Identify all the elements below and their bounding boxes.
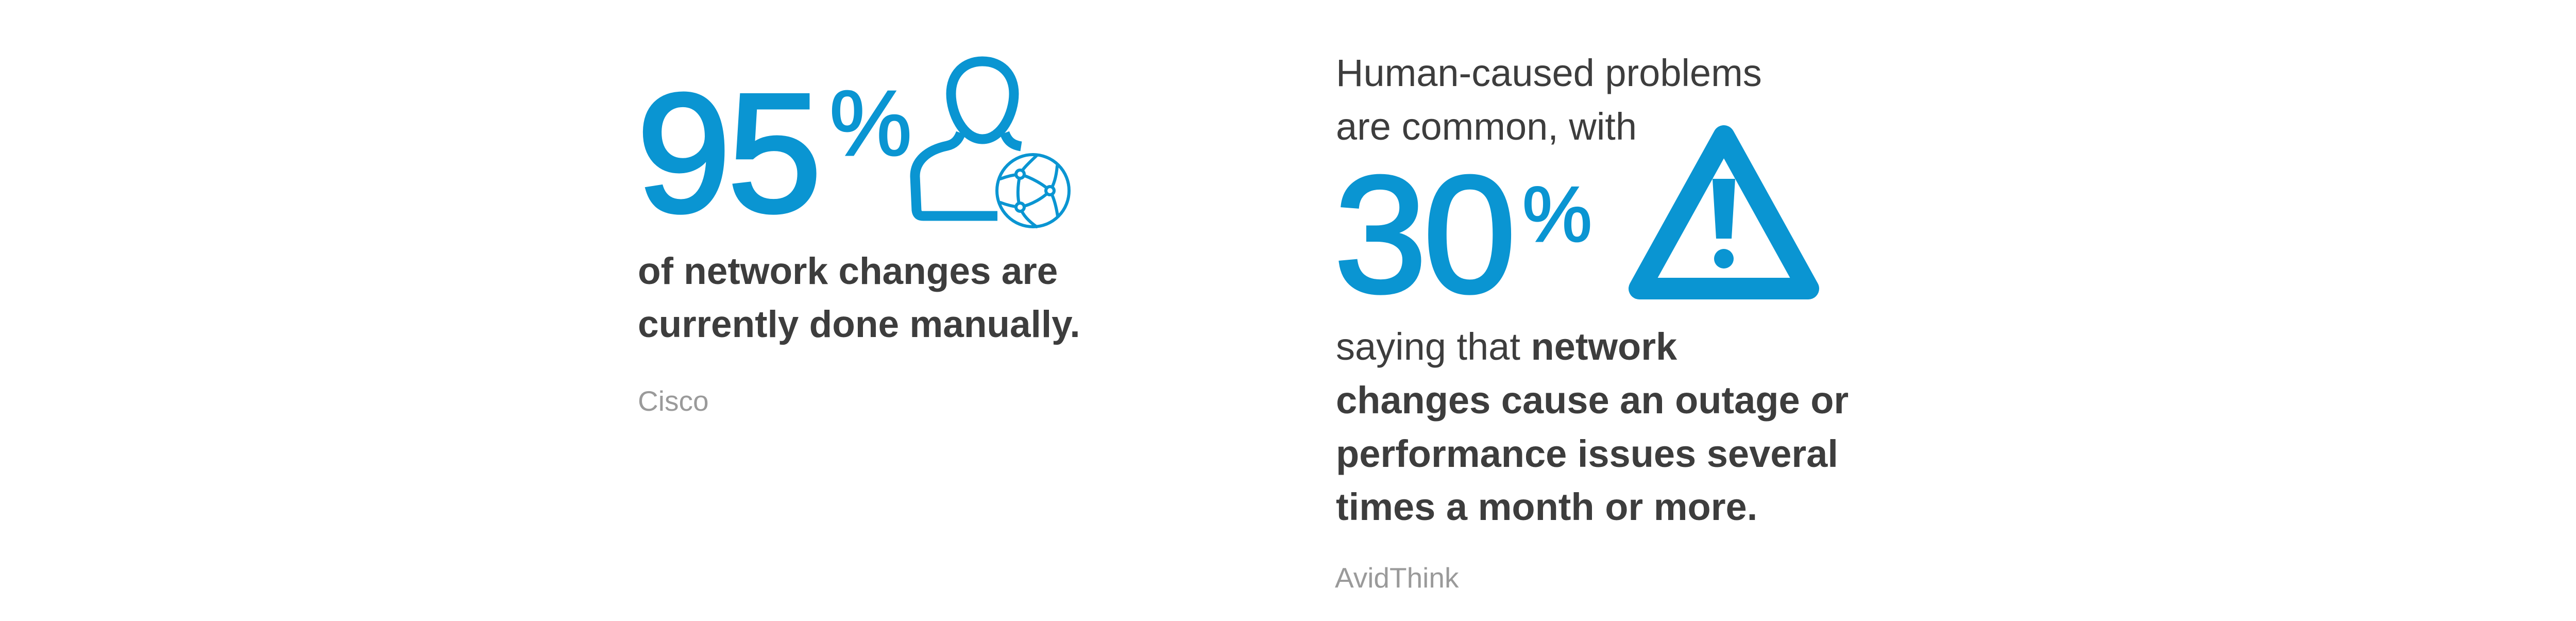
description text: changes cause an outage or [1336,379,1849,422]
panel: 95 percent stat [637,58,1080,417]
intro text: Human-caused problems [1336,52,1762,94]
percent sign: % [829,72,912,175]
description text: of network changes are [638,250,1058,292]
source: AvidThink: AvidThink [1335,562,1459,594]
percent sign: % [1522,171,1592,258]
icon: person with globe [915,61,1069,227]
panel: 30 percent stat [1334,52,1859,594]
description text: times a month or more. [1336,485,1757,528]
description text: performance issues several [1336,432,1838,475]
description text: currently done manually. [638,304,1080,345]
big number 95: 95 [637,58,819,247]
source: Cisco: Cisco [638,385,709,417]
description text: saying that network [1336,325,1677,368]
intro text: are common, with [1336,105,1637,148]
icon: warning triangle [1639,136,1808,289]
big number 30: 30 [1334,142,1513,327]
